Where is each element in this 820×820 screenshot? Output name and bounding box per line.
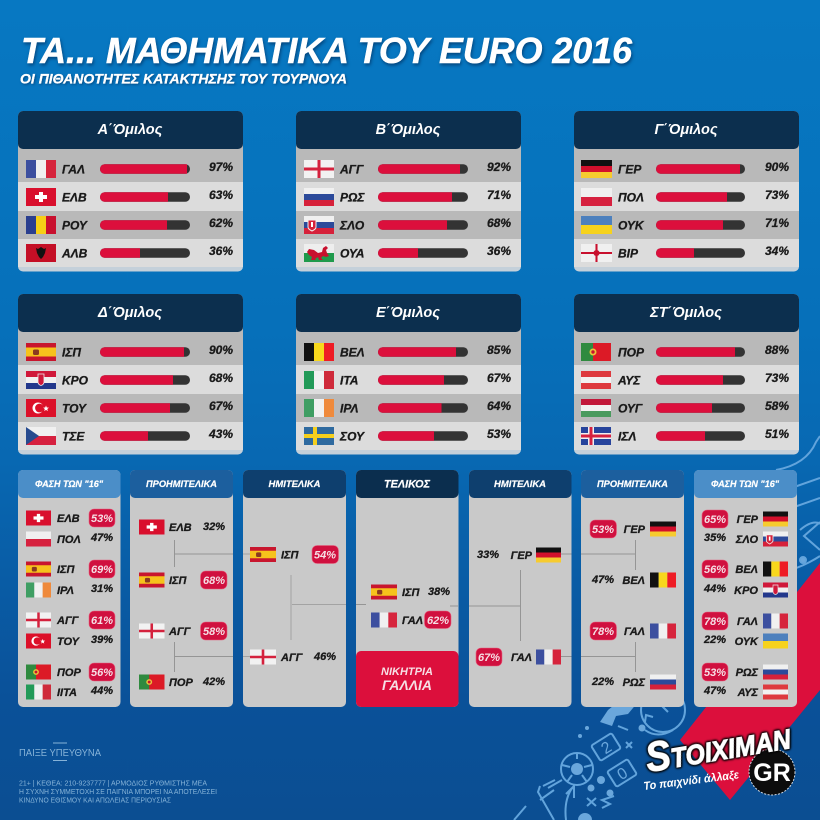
panel: group A: 97%: [209, 160, 233, 174]
panel: group A: ΡΟΥ: [62, 218, 88, 232]
panel: round of 16 left: 56%: [91, 667, 113, 679]
panel: final: ΓΑΛ: [402, 615, 423, 627]
panel: group D: [18, 294, 243, 454]
panel: round of 16 left: ΑΓΓ: [56, 615, 80, 627]
panel: final: [356, 470, 458, 707]
panel: group C: Γ΄Όμιλος: [654, 122, 718, 138]
panel: quarter-finals left: 42%: [202, 676, 225, 688]
panel: round of 16 right: 53%: [704, 667, 726, 679]
panel: group C: ΓΕΡ: [618, 162, 642, 176]
panel: group C: [574, 111, 799, 272]
panel: round of 16 left: ΠΟΛ: [57, 534, 81, 546]
panel: group B: [296, 111, 521, 272]
panel: quarter-finals left: [130, 470, 233, 707]
legal text: Η ΣΥΧΝΗ ΣΥΜΜΕΤΟΧΗ ΣΕ ΠΑΙΓΝΙΑ ΜΠΟΡΕΙ ΝΑ ΑΠΟΤΕΛΕΣΕΙ: [19, 789, 217, 796]
panel: round of 16 right: ΚΡΟ: [734, 585, 758, 597]
panel: group D: 43%: [208, 427, 233, 441]
panel: group C: 73%: [765, 188, 789, 202]
panel: group D: 68%: [209, 371, 233, 385]
panel: group A: 62%: [209, 216, 233, 230]
panel: round of 16 left: ΕΛΒ: [57, 513, 80, 525]
icon: score tile 2: [591, 733, 621, 762]
panel: group B: 71%: [487, 188, 511, 202]
panel: semi-finals right: 33%: [477, 549, 499, 561]
panel: group C: 71%: [765, 216, 789, 230]
panel: final: ΤΕΛΙΚΟΣ: [384, 478, 430, 490]
panel: group E: [296, 294, 521, 454]
panel: group D: 67%: [209, 399, 233, 413]
panel: group F: ΑΥΣ: [617, 374, 641, 388]
panel: group B: 92%: [487, 160, 511, 174]
tagline: Το παιχνίδι άλλαξε: [643, 769, 740, 793]
badge: GR: GR: [753, 759, 791, 787]
panel: round of 16 left: 61%: [91, 615, 113, 627]
panel: semi-finals right: ΗΜΙΤΕΛΙΚΑ: [494, 479, 546, 490]
panel: group E: 53%: [487, 427, 511, 441]
panel: round of 16 left: ΠΟΡ: [57, 667, 81, 679]
panel: group D: Δ΄Όμιλος: [97, 305, 162, 321]
panel: round of 16 left: 47%: [90, 532, 113, 544]
panel: group F: 88%: [765, 343, 789, 357]
wordmark: STOIXIMAN: [642, 710, 794, 781]
title: ΤΑ... ΜΑΘΗΜΑΤΙΚΑ ΤΟΥ EURO 2016: [21, 30, 633, 71]
panel: group A: 63%: [209, 188, 233, 202]
panel: group A: ΓΑΛ: [62, 162, 85, 176]
panel: group B: ΑΓΓ: [339, 162, 364, 176]
panel: group E: 85%: [487, 343, 511, 357]
panel: group C: 90%: [765, 160, 789, 174]
panel: round of 16 left: ΙΣΠ: [57, 564, 76, 576]
panel: group F: ΣΤ΄Όμιλος: [649, 305, 722, 321]
panel: round of 16 right: 47%: [703, 685, 726, 697]
panel: group F: ΠΟΡ: [618, 346, 645, 360]
responsible gaming mark: [19, 742, 101, 761]
panel: group D: ΤΟΥ: [62, 402, 87, 416]
panel: semi-finals right: ΓΕΡ: [511, 550, 533, 562]
logo: Stoiximan GR: [642, 710, 795, 795]
panel: quarter-finals left: 58%: [203, 626, 225, 638]
legal text: [19, 780, 217, 804]
icon: score tile 2: 2: [599, 739, 615, 758]
panel: semi-finals left: 46%: [313, 651, 336, 663]
panel: group C: 34%: [765, 244, 789, 258]
panel: quarter-finals left: 68%: [203, 575, 225, 587]
panel: quarter-finals left: ΕΛΒ: [169, 522, 192, 534]
panel: round of 16 right: ΑΥΣ: [737, 687, 759, 699]
panel: semi-finals left: ΑΓΓ: [280, 652, 304, 664]
panel: group C: ΠΟΛ: [618, 190, 644, 204]
legal text: ΚΙΝΔΥΝΟ ΕΘΙΣΜΟΥ ΚΑΙ ΑΠΩΛΕΙΑΣ ΠΕΡΙΟΥΣΙΑΣ: [19, 798, 172, 804]
panel: round of 16 left: 39%: [91, 634, 113, 646]
responsible gaming mark: ΠΑΙΞΕ ΥΠΕΥΘΥΝΑ: [19, 747, 101, 759]
panel: final: 62%: [427, 615, 449, 627]
panel: quarter-finals left: 32%: [203, 521, 225, 533]
panel: group B: ΟΥΑ: [340, 246, 364, 260]
panel: semi-finals right: ΓΑΛ: [511, 652, 532, 664]
panel: round of 16 right: 56%: [704, 564, 726, 576]
panel: round of 16 left: ΦΑΣΗ ΤΩΝ "16": [35, 479, 103, 490]
panel: group A: ΑΛΒ: [61, 246, 88, 260]
panel: group B: ΡΩΣ: [340, 190, 365, 204]
panel: round of 16 left: ΙΡΛ: [57, 585, 74, 597]
panel: group F: 51%: [765, 427, 789, 441]
panel: round of 16 right: 44%: [703, 583, 726, 595]
winner box: ΓΑΛΛΙΑ: [382, 677, 432, 693]
icon: football: [561, 753, 593, 785]
panel: group E: ΣΟΥ: [339, 430, 365, 444]
subtitle: ΟΙ ΠΙΘΑΝΟΤΗΤΕΣ ΚΑΤΑΚΤΗΣΗΣ ΤΟΥ ΤΟΥΡΝΟΥΑ: [20, 72, 347, 86]
panel: quarter-finals right: 22%: [591, 676, 614, 688]
panel: round of 16 left: ΙΙΤΑ: [57, 687, 77, 699]
tactics line art: bottom: [514, 688, 685, 820]
panel: quarter-finals right: ΓΕΡ: [624, 524, 646, 536]
panel: round of 16 right: ΣΛΟ: [735, 534, 758, 546]
panel: round of 16 left: 31%: [91, 583, 113, 595]
panel: quarter-finals left: ΙΣΠ: [169, 575, 188, 587]
panel: group B: 36%: [487, 244, 511, 258]
panel: quarter-finals right: ΠΡΟΗΜΙΤΕΛΙΚΑ: [597, 479, 668, 490]
panel: final: ΙΣΠ: [402, 587, 421, 599]
panel: round of 16 right: 22%: [703, 634, 726, 646]
panel: quarter-finals right: 47%: [591, 574, 614, 586]
panel: round of 16 right: 78%: [704, 616, 726, 628]
icon: clock and tactics marks: [514, 688, 685, 820]
panel: semi-finals right: 67%: [478, 652, 500, 664]
panel: group C: ΒΙΡ: [618, 246, 639, 260]
legal text: 21+ | ΚΕΘΕΑ: 210-9237777 | ΑΡΜΟΔΙΟΣ ΡΥΘΜΙΣΤΗΣ ΜΕΑ: [19, 780, 207, 788]
panel: group A: Α΄Όμιλος: [97, 122, 163, 138]
panel: quarter-finals right: ΒΕΛ: [622, 575, 645, 587]
panel: quarter-finals right: [581, 470, 684, 707]
tactics line art: right: [776, 436, 820, 570]
panel: group E: ΒΕΛ: [340, 346, 365, 360]
winner box: ΝΙΚΗΤΡΙΑ: [381, 666, 433, 678]
panel: round of 16 right: ΓΑΛ: [737, 616, 758, 628]
panel: round of 16 right: 35%: [704, 532, 726, 544]
panel: quarter-finals right: 53%: [592, 524, 614, 536]
panel: group E: ΙΡΛ: [340, 402, 358, 416]
panel: group F: ΙΣΛ: [618, 430, 636, 444]
panel: semi-finals left: ΙΣΠ: [281, 550, 300, 562]
panel: group E: Ε΄Όμιλος: [376, 305, 440, 321]
badge: GR: [749, 749, 795, 795]
red diagonal shape: [680, 563, 820, 800]
panel: semi-finals left: ΗΜΙΤΕΛΙΚΑ: [268, 479, 321, 490]
panel: group B: Β΄Όμιλος: [376, 122, 441, 138]
panel: group D: ΙΣΠ: [62, 346, 81, 360]
icon: score tile 0: [607, 759, 637, 788]
panel: round of 16 left: 53%: [91, 513, 113, 525]
panel: group C: ΟΥΚ: [618, 218, 645, 232]
panel: group A: ΕΛΒ: [62, 190, 87, 204]
panel: group E: 67%: [487, 371, 511, 385]
panel: round of 16 right: [694, 470, 797, 707]
panel: semi-finals right: [469, 470, 572, 707]
panel: semi-finals left: 54%: [314, 550, 336, 562]
panel: round of 16 left: 69%: [91, 564, 113, 576]
panel: semi-finals left: [243, 470, 346, 707]
panel: group E: ΙΤΑ: [340, 374, 358, 388]
panel: round of 16 right: ΡΩΣ: [736, 667, 759, 679]
panel: round of 16 left: 44%: [90, 685, 113, 697]
panel: round of 16 right: ΓΕΡ: [737, 514, 759, 526]
panel: group F: ΟΥΓ: [618, 402, 643, 416]
panel: group D: 90%: [209, 343, 233, 357]
panel: round of 16 right: ΟΥΚ: [735, 636, 759, 648]
panel: round of 16 left: [18, 470, 120, 707]
panel: group B: 68%: [487, 216, 511, 230]
winner box: [356, 651, 458, 707]
panel: group D: ΚΡΟ: [62, 374, 89, 388]
panel: group B: ΣΛΟ: [339, 218, 365, 232]
panel: round of 16 right: ΦΑΣΗ ΤΩΝ "16": [711, 479, 779, 490]
panel: group A: 36%: [209, 244, 233, 258]
panel: round of 16 right: ΒΕΛ: [735, 564, 758, 576]
panel: quarter-finals left: ΑΓΓ: [168, 626, 192, 638]
panel: final: 38%: [428, 586, 450, 598]
icon: score tile 0: 0: [615, 765, 631, 784]
panel: round of 16 right: 65%: [704, 514, 726, 526]
panel: group E: 64%: [487, 399, 511, 413]
panel: quarter-finals right: 78%: [592, 626, 614, 638]
panel: group F: [574, 294, 799, 454]
panel: group A: [18, 111, 243, 272]
panel: quarter-finals left: ΠΟΡ: [169, 677, 193, 689]
panel: group D: ΤΣΕ: [62, 430, 85, 444]
panel: quarter-finals right: ΓΑΛ: [624, 626, 645, 638]
panel: group F: 58%: [765, 399, 789, 413]
panel: group F: 73%: [765, 371, 789, 385]
panel: round of 16 left: ΤΟΥ: [57, 636, 81, 648]
panel: quarter-finals right: ΡΩΣ: [623, 677, 646, 689]
panel: quarter-finals left: ΠΡΟΗΜΙΤΕΛΙΚΑ: [146, 479, 217, 490]
